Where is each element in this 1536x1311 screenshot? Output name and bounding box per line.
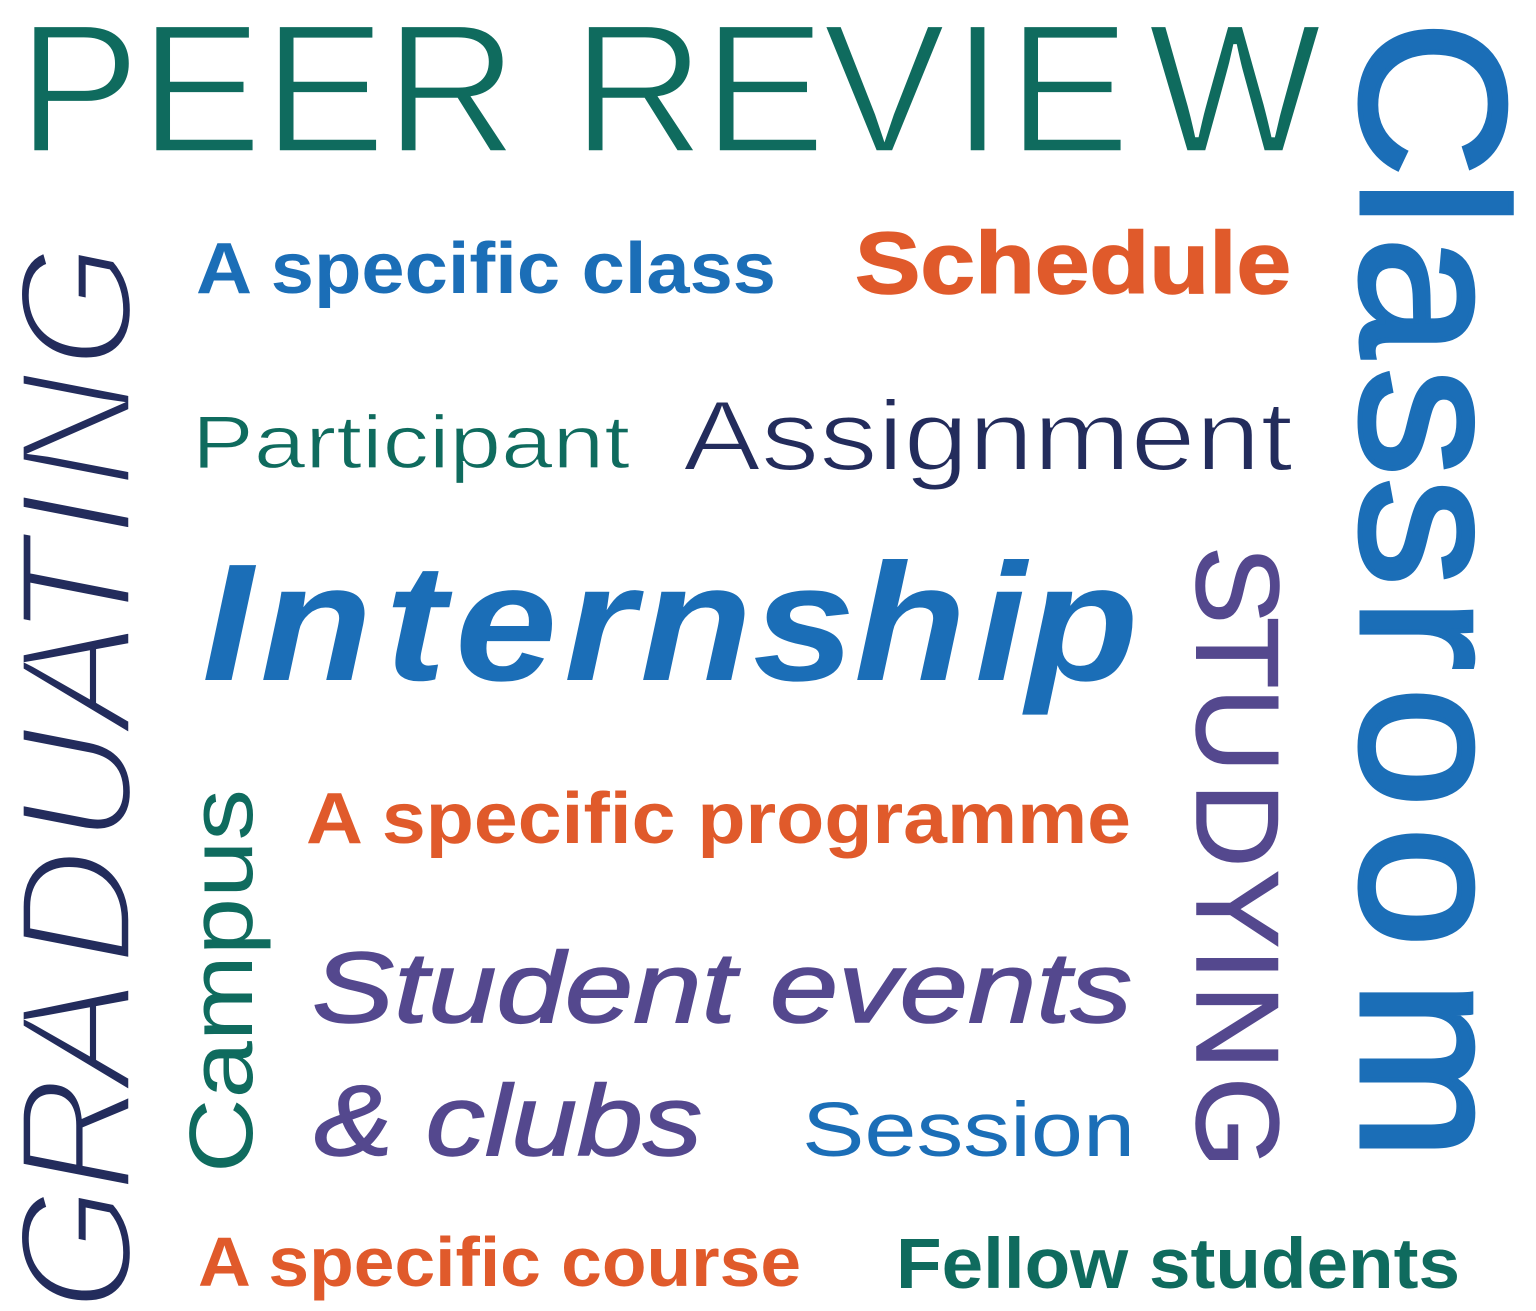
word: Participant: Participant — [192, 400, 630, 484]
word: Student events: Student events — [312, 932, 1132, 1044]
word: STUDYING (vertical): STUDYING — [1172, 546, 1303, 1168]
word: Session: Session — [802, 1087, 1135, 1173]
word: &amp; clubs: & clubs — [314, 1065, 702, 1177]
word: Schedule: Schedule — [855, 215, 1291, 312]
word: A specific course: A specific course — [198, 1223, 801, 1301]
word: Campus (vertical): Campus — [172, 789, 272, 1173]
word: Fellow students: Fellow students — [896, 1225, 1460, 1304]
word: A specific programme: A specific programme — [306, 779, 1131, 859]
word: Internship: Internship — [202, 530, 1139, 716]
word: A specific class: A specific class — [196, 229, 776, 309]
word: Assignment: Assignment — [683, 380, 1293, 491]
